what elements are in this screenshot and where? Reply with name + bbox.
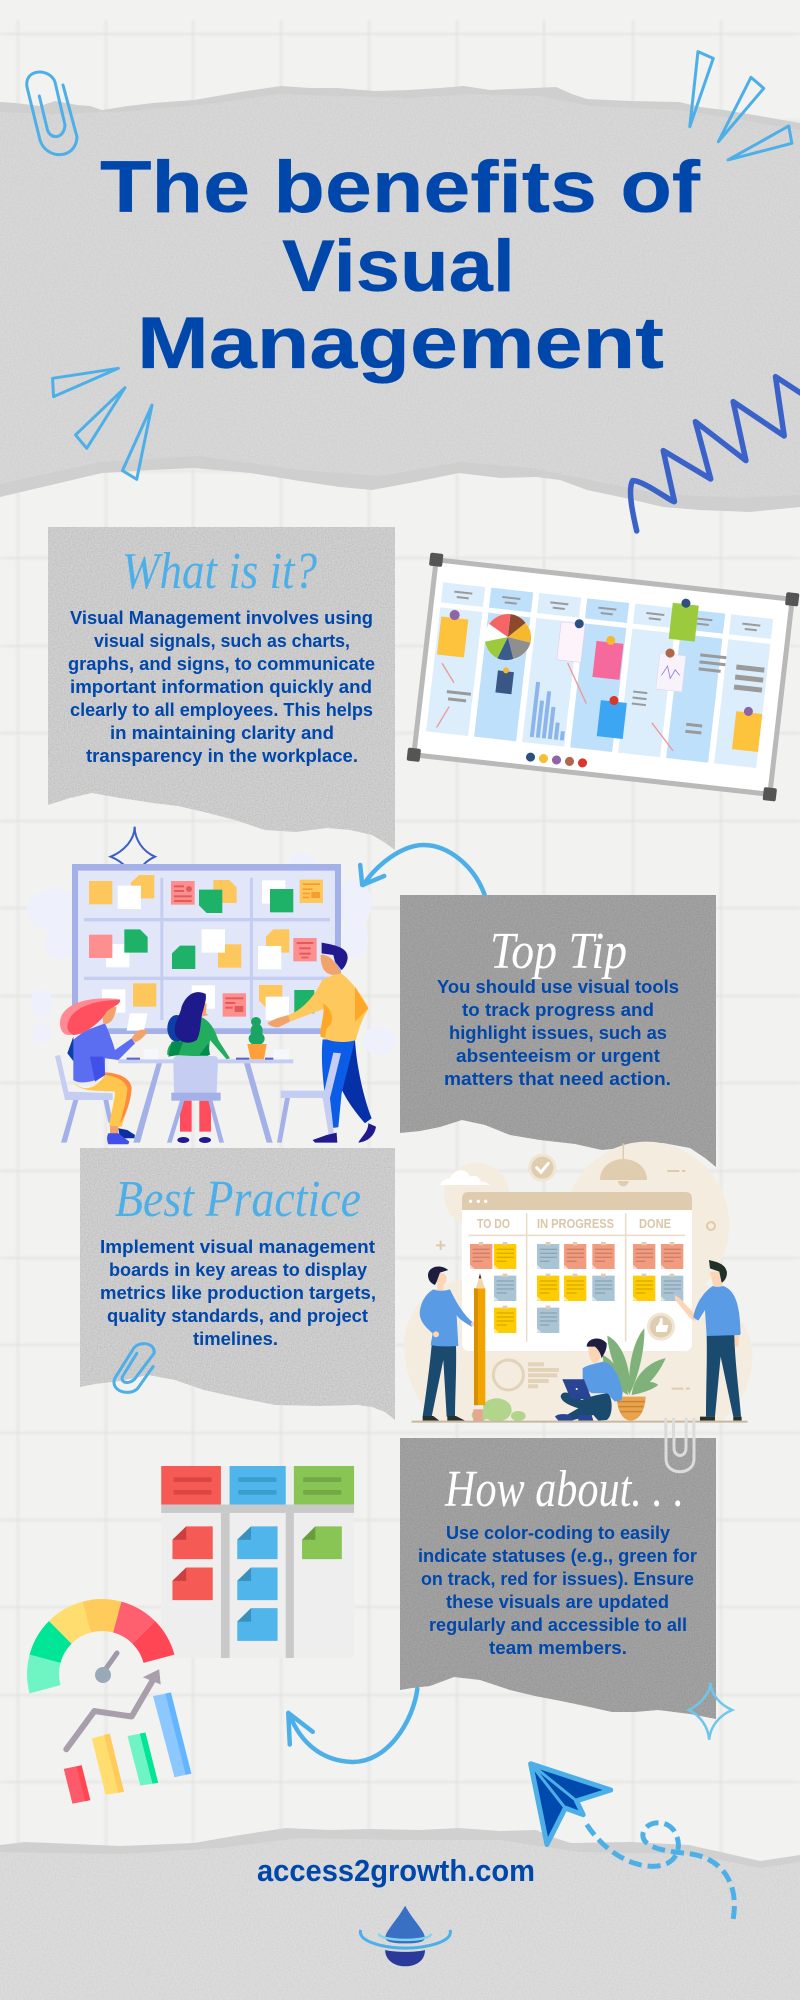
top torn paper band	[0, 86, 800, 512]
icon: sparkle	[689, 1683, 732, 1740]
illustration: team at board	[27, 827, 395, 1144]
text block: what is it: graphs, and signs, to communicate	[68, 654, 375, 674]
logo: water drop	[360, 1906, 450, 1966]
text block: what is it	[68, 608, 375, 766]
kanban column labels: DONE	[639, 1216, 671, 1231]
text block: what is it: Visual Management involves using	[70, 608, 373, 628]
panel: what is it	[48, 527, 395, 850]
heading: how about: How about. . .	[444, 1461, 684, 1518]
text block: what is it: clearly to all employees. This helps	[70, 700, 373, 720]
icon: grey paperclip	[666, 1419, 694, 1471]
panel: best practice	[80, 1148, 395, 1420]
panel: top tip	[400, 895, 716, 1167]
title	[100, 147, 701, 384]
text block: what is it: in maintaining clarity and	[110, 723, 334, 743]
text block: best practice: Implement visual management	[100, 1237, 375, 1257]
text block: top tip: matters that need action.	[444, 1069, 671, 1089]
text block: how about: these visuals are updated	[446, 1592, 669, 1612]
arrow: curved top	[360, 845, 485, 895]
text block: how about: on track, red for issues). Ensure	[421, 1569, 694, 1589]
illustration: colour kanban	[161, 1466, 354, 1658]
text block: what is it: transparency in the workplace.	[86, 746, 358, 766]
text block: how about: indicate statuses (e.g., green for	[418, 1546, 697, 1566]
text block: what is it: visual signals, such as charts,	[94, 631, 350, 651]
kanban column labels: IN PROGRESS	[537, 1216, 614, 1231]
website address: access2growth.com	[257, 1853, 535, 1888]
dashed flight path	[587, 1823, 734, 1919]
title: Visual	[282, 226, 515, 307]
heading: what is it: What is it?	[122, 543, 317, 600]
title: Management	[137, 303, 664, 384]
arrow: curved bottom	[288, 1689, 417, 1762]
text block: best practice: boards in key areas to display	[109, 1260, 367, 1280]
title: The benefits of	[100, 147, 701, 228]
illustration: whiteboard	[407, 553, 799, 802]
text block: how about	[418, 1523, 697, 1658]
text block: best practice	[100, 1237, 376, 1349]
text block: top tip: You should use visual tools	[437, 977, 679, 997]
text block: best practice: timelines.	[193, 1329, 278, 1349]
panel: how about	[400, 1438, 716, 1719]
kanban column labels: TO DO	[477, 1216, 510, 1231]
text block: top tip	[437, 977, 679, 1089]
icon: zigzag squiggle	[631, 377, 800, 531]
text block: top tip: highlight issues, such as	[449, 1023, 667, 1043]
text block: how about: team members.	[489, 1638, 627, 1658]
kanban column labels	[477, 1216, 671, 1231]
icon: paper plane	[531, 1764, 611, 1845]
grey paperclip overlay	[666, 1438, 694, 1472]
icon: burst triangles left	[53, 368, 152, 479]
icon: burst triangles top right	[690, 52, 792, 160]
text block: how about: Use color-coding to easily	[446, 1523, 670, 1543]
text block: how about: regularly and accessible to all	[429, 1615, 687, 1635]
text block: top tip: absenteeism or urgent	[456, 1046, 660, 1066]
icon: paperclip small	[114, 1344, 154, 1392]
bottom torn paper band	[0, 1828, 800, 2000]
text block: top tip: to track progress and	[462, 1000, 654, 1020]
text block: best practice: quality standards, and project	[107, 1306, 368, 1326]
text block: what is it: important information quickly and	[70, 677, 372, 697]
heading: best practice: Best Practice	[115, 1171, 361, 1228]
heading: top tip: Top Tip	[490, 923, 627, 980]
illustration: kanban team	[404, 1142, 753, 1423]
text block: best practice: metrics like production targets,	[100, 1283, 376, 1303]
chart: growth bars and arrow	[64, 1669, 191, 1804]
chart: gauge	[27, 1599, 174, 1693]
icon: paperclip top left	[27, 72, 77, 155]
